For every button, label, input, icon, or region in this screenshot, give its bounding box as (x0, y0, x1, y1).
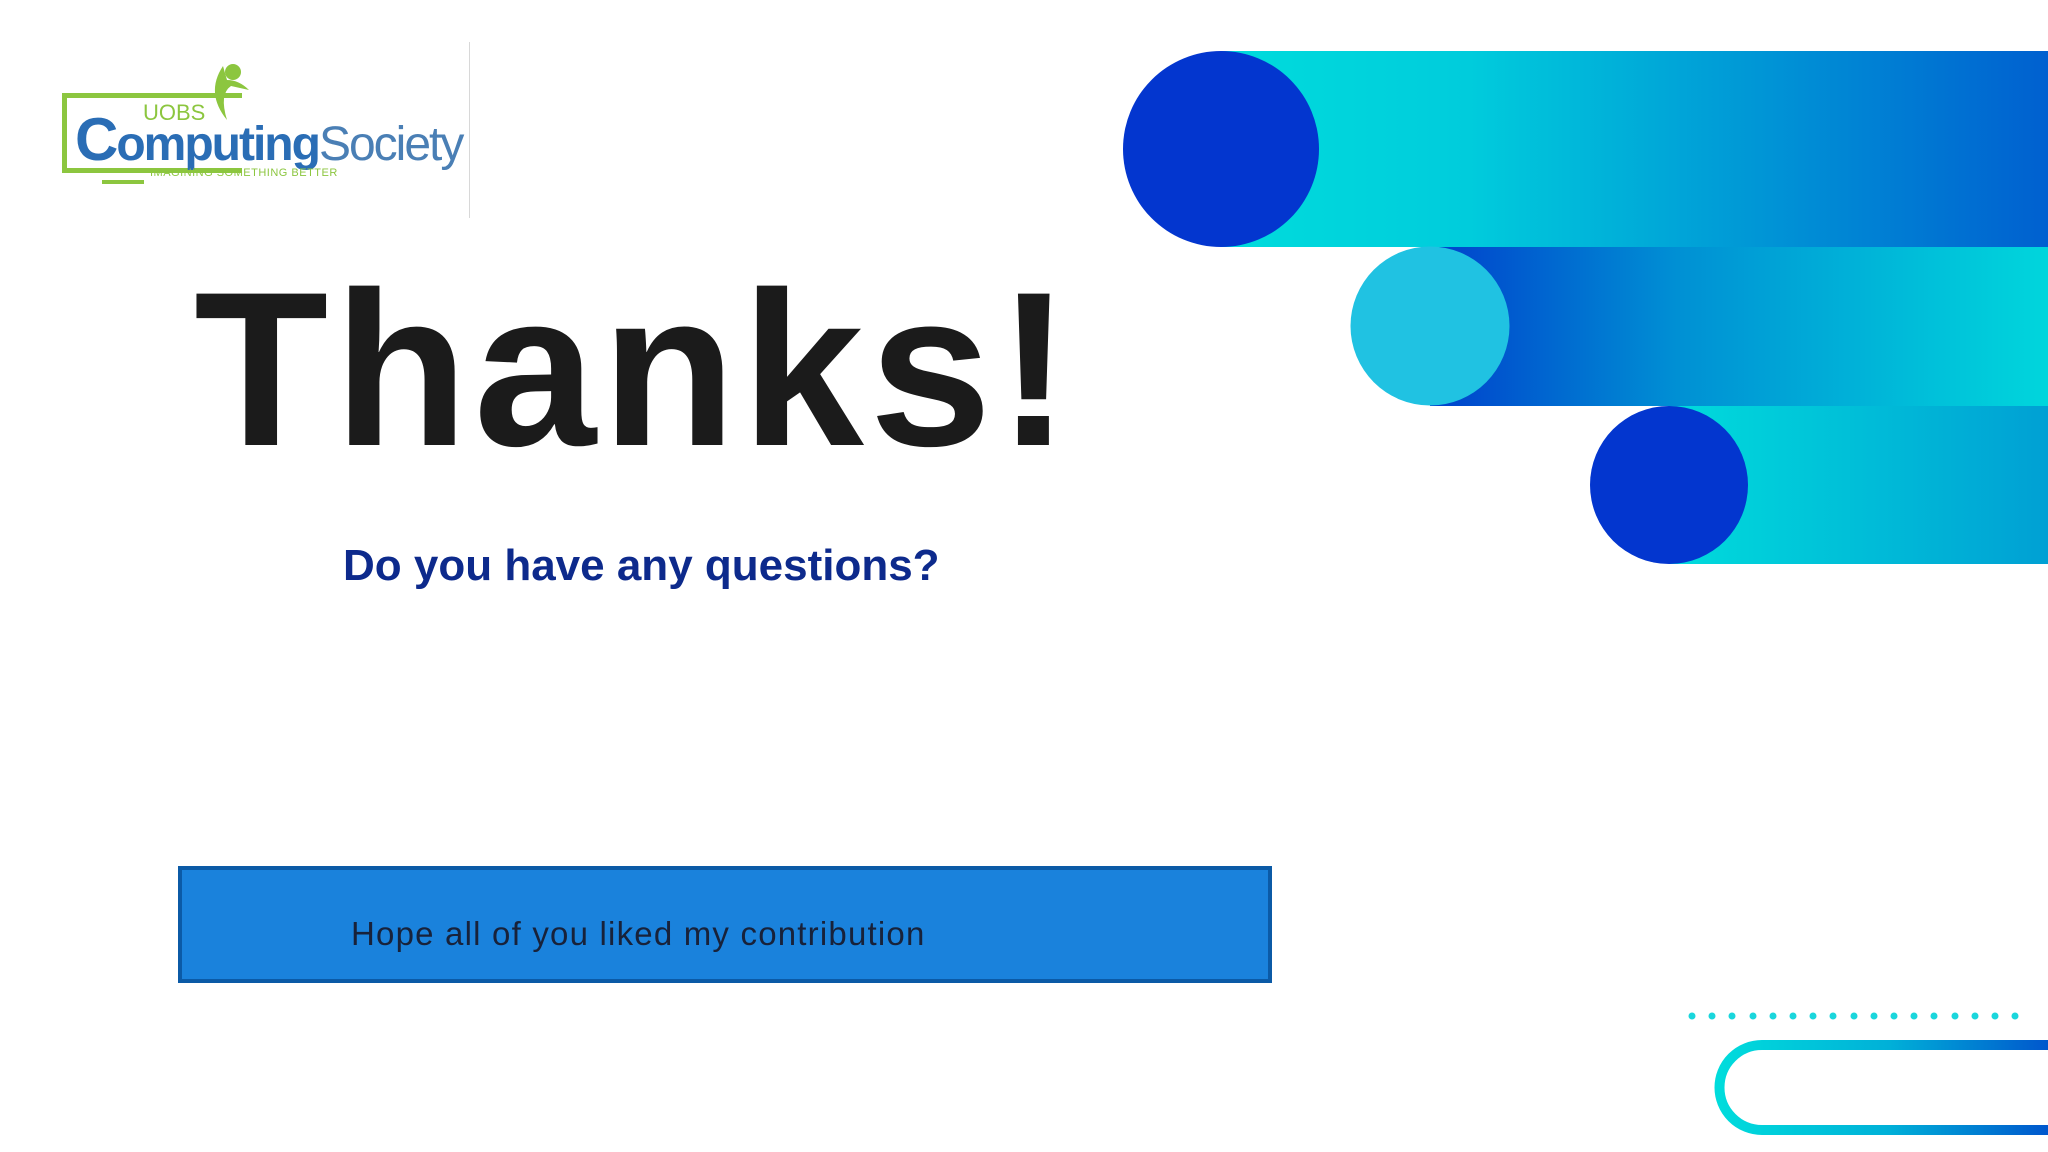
logo text: UOBS (143, 100, 205, 125)
logo: IMAGINING SOMETHING BETTER (150, 167, 338, 179)
dotted line (1688, 1012, 2018, 1020)
bar 2 (1350, 246, 2048, 406)
bar 3 (1590, 406, 2048, 564)
bar 1 (1123, 51, 2048, 247)
logo (62, 64, 464, 184)
callout box (178, 866, 1272, 983)
logo figure icon (214, 64, 249, 120)
pill outline (1720, 1045, 2048, 1130)
title: Thanks! (194, 246, 1076, 492)
subtitle: Do you have any questions? (343, 541, 940, 590)
logo frame (62, 93, 242, 173)
logo: ComputingSociety (75, 106, 462, 173)
callout text: Hope all of you liked my contribution (351, 915, 926, 952)
